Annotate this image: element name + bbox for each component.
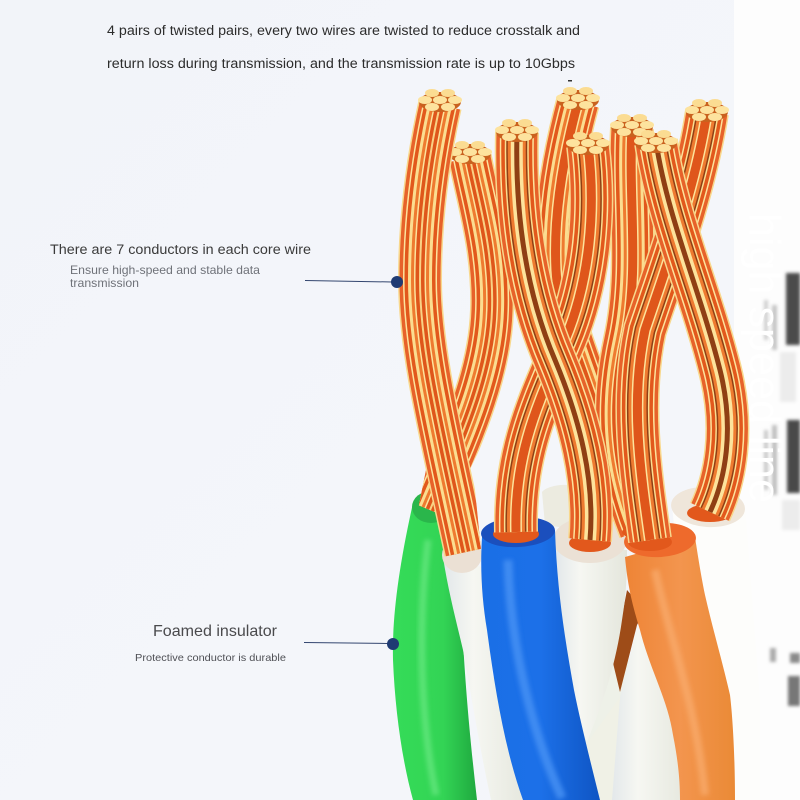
wire: right front (634, 130, 733, 522)
copper conductors (418, 87, 733, 552)
wire: back right (628, 99, 729, 551)
panel: white side strip (734, 0, 800, 800)
core: rear white centre (542, 485, 585, 530)
core: brown shadow (613, 590, 645, 692)
marker dot (387, 638, 399, 650)
callout: insulator (135, 623, 399, 664)
callout description: Protective conductor is durable (135, 652, 286, 664)
core: lower white strands (470, 627, 690, 800)
leader line (304, 642, 388, 644)
smudged dark background marks (764, 273, 800, 706)
wire: centre front (493, 132, 610, 543)
wire: back centre (556, 87, 622, 520)
callout heading: There are 7 conductors in each core wire (50, 242, 311, 257)
intro text: return loss during transmission, and the transmission rate is up to 10Gbps (107, 56, 575, 71)
marker dot (391, 276, 403, 288)
core: white centre (553, 517, 627, 742)
intro text (107, 23, 580, 71)
callout description: Ensure high-speed and stable data (70, 263, 260, 277)
callout: conductors (50, 242, 403, 290)
small tick mark (568, 80, 572, 82)
rotated side text: high speed line (740, 213, 789, 503)
wire: centre left front (495, 119, 611, 552)
core: green (393, 491, 477, 800)
leader line (305, 280, 392, 282)
core: orange (623, 521, 735, 800)
intro text: 4 pairs of twisted pairs, every two wires are twisted to reduce crosstalk and (107, 23, 580, 38)
wire: back right centre (610, 114, 658, 539)
callout heading: Foamed insulator (153, 623, 278, 640)
core: blue (480, 515, 600, 800)
wire: left front (418, 89, 466, 552)
core: white left (442, 537, 530, 800)
wire: back left (430, 141, 492, 510)
callout description: transmission (70, 276, 139, 290)
cable cores (393, 484, 760, 800)
core: rear white right (670, 484, 760, 800)
callout description (70, 263, 260, 290)
